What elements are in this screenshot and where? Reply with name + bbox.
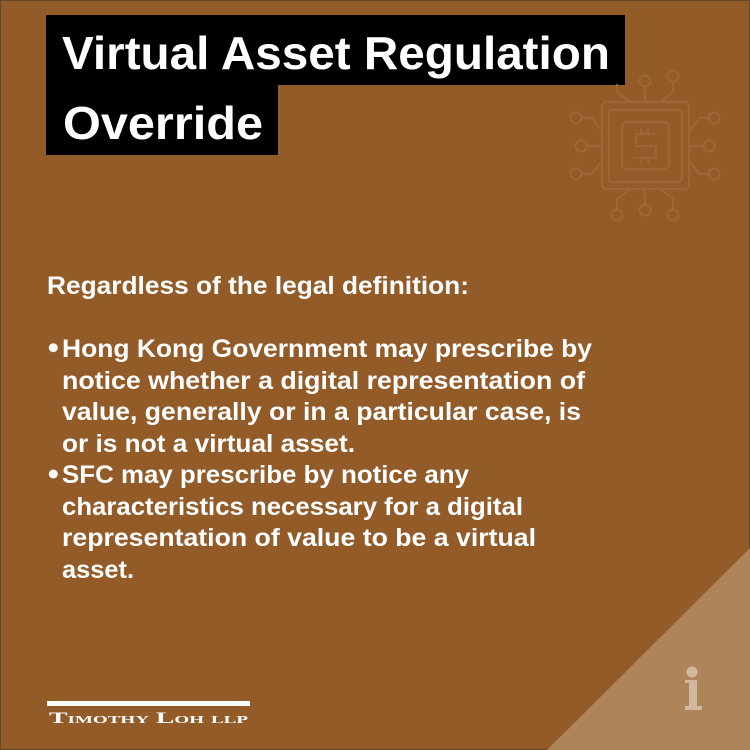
intro text: Regardless of the legal definition:: [47, 272, 469, 300]
bullet: SFC: representation of value to be a virtual: [62, 524, 536, 552]
bullet: SFC: SFC may prescribe by notice any: [62, 461, 469, 489]
bullet: SFC: asset.: [62, 556, 134, 584]
icon: crypto chip with dollar sign: [570, 70, 720, 220]
bullet: Hong Kong Government: or is not a virtual asset.: [62, 430, 355, 458]
title block: Virtual Asset Regulation: [62, 27, 610, 79]
title block: [46, 15, 625, 155]
title block: Override: [63, 97, 263, 149]
corner triangle with info icon: [547, 548, 750, 750]
bullet: Hong Kong Government: Hong Kong Government may prescribe by: [62, 335, 592, 363]
logo: Timothy Loh LLP: [47, 701, 250, 727]
bullet: SFC: characteristics necessary for a digital: [62, 493, 523, 521]
bullet: Hong Kong Government: notice whether a digital representation of: [62, 367, 586, 395]
bullet: Hong Kong Government: value, generally or in a particular case, is: [62, 398, 581, 426]
icon: info: [685, 666, 702, 710]
bullet: SFC: [49, 461, 536, 584]
bullet: Hong Kong Government: [49, 335, 592, 458]
logo: Timothy Loh LLP: Timothy Loh llp: [49, 710, 248, 727]
